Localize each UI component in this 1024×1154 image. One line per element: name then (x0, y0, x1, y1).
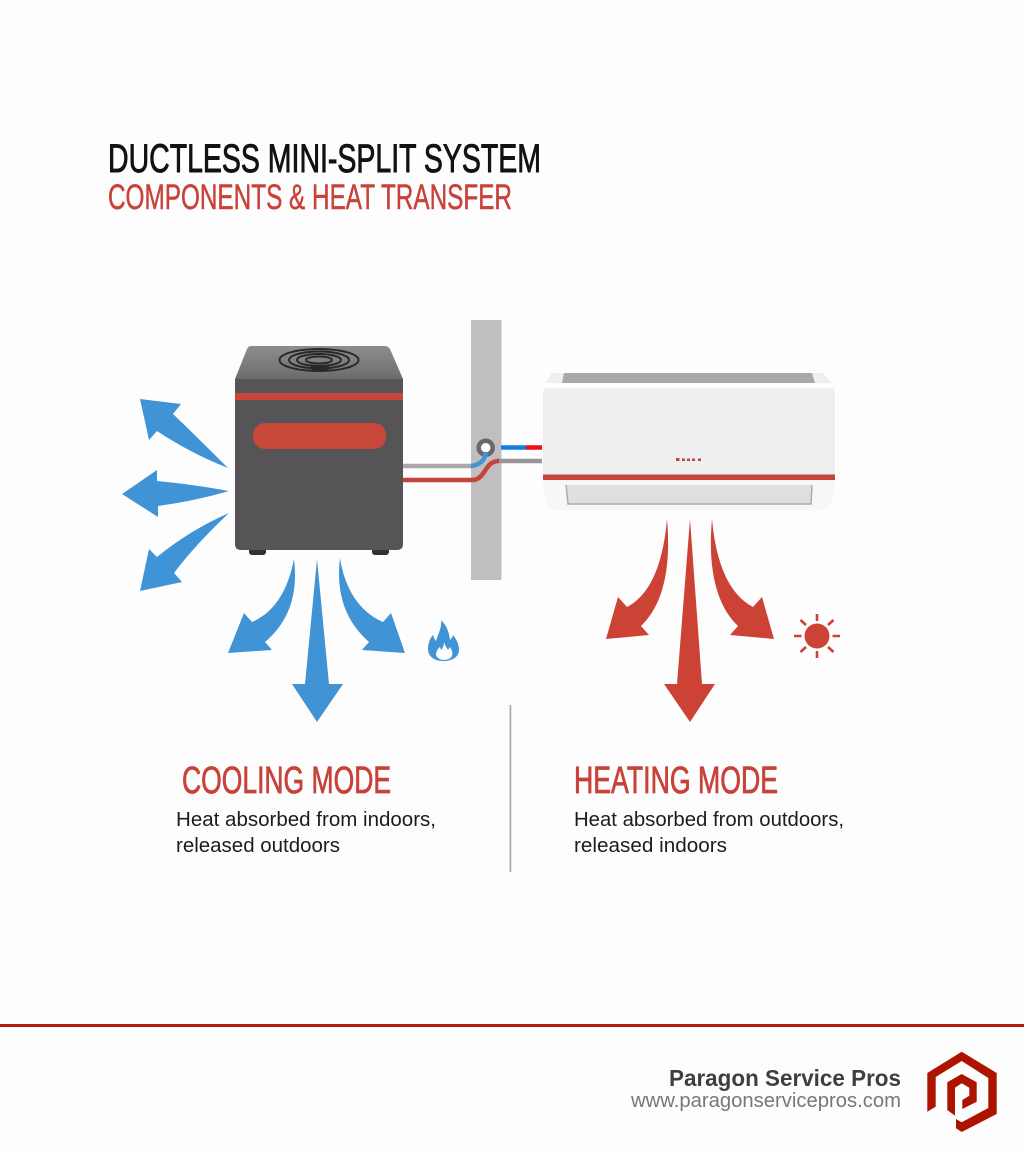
heading: cooling mode: COOLING MODE (182, 760, 391, 802)
description: heating: Heat absorbed from outdoors, (574, 809, 844, 831)
front panel (543, 388, 835, 475)
website: www.paragonservicepros.com (630, 1090, 901, 1112)
refrigerant lines (403, 441, 542, 480)
lower body (543, 480, 835, 510)
icon: sun (794, 614, 840, 658)
wall (471, 320, 502, 580)
description: cooling: released outdoors (176, 835, 340, 857)
arrow: down left (228, 559, 295, 653)
outdoor unit (235, 346, 403, 555)
indicator lights (676, 458, 701, 461)
icon: logo (927, 1052, 997, 1132)
footer rule (0, 1024, 1024, 1027)
arrow: down right (711, 519, 774, 639)
cabinet (235, 379, 403, 550)
panel: cooling mode (176, 760, 442, 857)
heading: subtitle: COMPONENTS & HEAT TRANSFER (108, 178, 512, 217)
arrow: down (292, 559, 343, 722)
panel: heating mode (574, 760, 850, 857)
red panel (253, 423, 386, 449)
arrow: down left (606, 519, 668, 639)
description: cooling: Heat absorbed from indoors, (176, 809, 436, 831)
arrow: down (664, 519, 715, 722)
red arrows (606, 519, 774, 722)
footer brand text (630, 1065, 901, 1112)
air vent (566, 485, 812, 504)
title (108, 137, 541, 217)
feet (249, 545, 389, 555)
divider (510, 705, 511, 872)
fan grille (280, 349, 358, 371)
top cover (545, 373, 832, 383)
top grille (562, 373, 815, 383)
red stripe (235, 393, 403, 400)
outdoor unit top (235, 346, 403, 379)
icon: flame (428, 620, 459, 661)
indoor unit (543, 373, 835, 510)
description: heating: released indoors (574, 835, 727, 857)
company name: Paragon Service Pros (669, 1065, 901, 1091)
heading: main title: DUCTLESS MINI-SPLIT SYSTEM (108, 137, 541, 181)
red stripe (543, 474, 835, 480)
arrow: lower left (140, 513, 229, 591)
arrow: down right (339, 558, 405, 653)
heading: heating mode: HEATING MODE (574, 760, 778, 802)
blue arrows (122, 399, 405, 722)
arrow: left (122, 470, 229, 517)
arrow: upper left (140, 399, 228, 468)
